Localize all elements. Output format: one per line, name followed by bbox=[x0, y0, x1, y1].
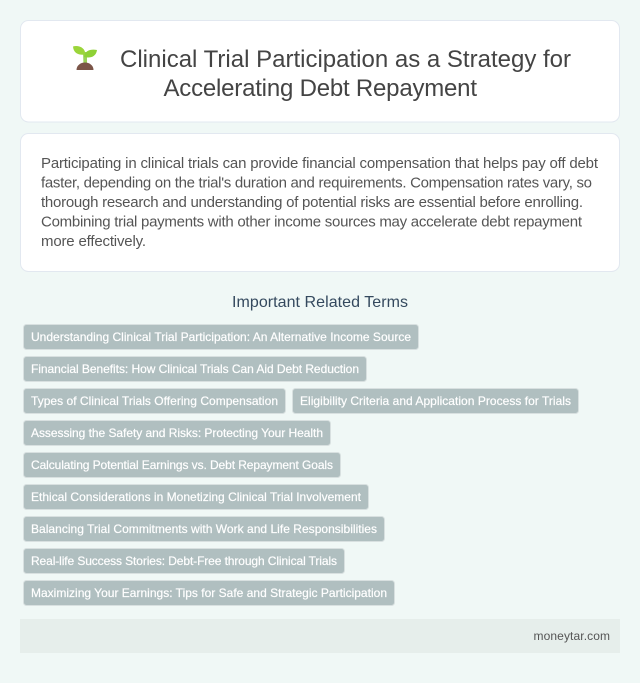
text block: summary: Combining trial payments with other income sources may accelerate debt repayment bbox=[41, 214, 583, 230]
panel: summary card bbox=[20, 134, 620, 272]
tag 10 bbox=[24, 580, 394, 606]
title: Accelerating Debt Repayment bbox=[164, 75, 477, 102]
tag 7: Ethical Considerations in Monetizing Clinical Trial Involvement bbox=[31, 490, 362, 504]
tag 3: Types of Clinical Trials Offering Compensation bbox=[31, 394, 278, 408]
icon: sprout bbox=[73, 46, 97, 70]
tag 2 bbox=[24, 356, 366, 382]
title: Clinical Trial Participation as a Strategy for bbox=[120, 46, 571, 73]
tag 5: Assessing the Safety and Risks: Protecting Your Health bbox=[31, 426, 323, 440]
heading: related terms: Important Related Terms bbox=[232, 294, 408, 311]
tag 7 bbox=[24, 484, 368, 510]
tag 6: Calculating Potential Earnings vs. Debt Repayment Goals bbox=[31, 458, 333, 472]
tag 4 bbox=[292, 388, 578, 414]
tag 1 bbox=[24, 324, 418, 350]
footer: moneytar.com bbox=[534, 629, 610, 643]
tag 10: Maximizing Your Earnings: Tips for Safe and Strategic Participation bbox=[31, 586, 387, 600]
footer bbox=[20, 619, 620, 653]
tag 3 bbox=[24, 388, 286, 414]
text block: summary: thorough research and understanding of potential risks are essential before enrolling. bbox=[41, 194, 583, 211]
text block: summary bbox=[41, 155, 599, 250]
text block: summary: more effectively. bbox=[41, 233, 146, 250]
tag 4: Eligibility Criteria and Application Process for Trials bbox=[300, 394, 571, 408]
title bbox=[120, 46, 571, 102]
tag 8 bbox=[24, 516, 384, 542]
panel: title card bbox=[20, 20, 620, 122]
text block: summary: faster, depending on the trial's duration and requirements. Compensation rates vary, so bbox=[41, 174, 592, 192]
text block: summary: Participating in clinical trials can provide financial compensation that helps pay off debt bbox=[41, 155, 599, 172]
tag 6 bbox=[24, 452, 340, 478]
tag 2: Financial Benefits: How Clinical Trials Can Aid Debt Reduction bbox=[31, 362, 359, 376]
tag 9 bbox=[24, 548, 344, 574]
tag 5 bbox=[24, 420, 330, 446]
tag 1: Understanding Clinical Trial Participation: An Alternative Income Source bbox=[31, 330, 411, 344]
tag 8: Balancing Trial Commitments with Work and Life Responsibilities bbox=[31, 522, 377, 536]
tag 9: Real-life Success Stories: Debt-Free through Clinical Trials bbox=[31, 554, 337, 568]
